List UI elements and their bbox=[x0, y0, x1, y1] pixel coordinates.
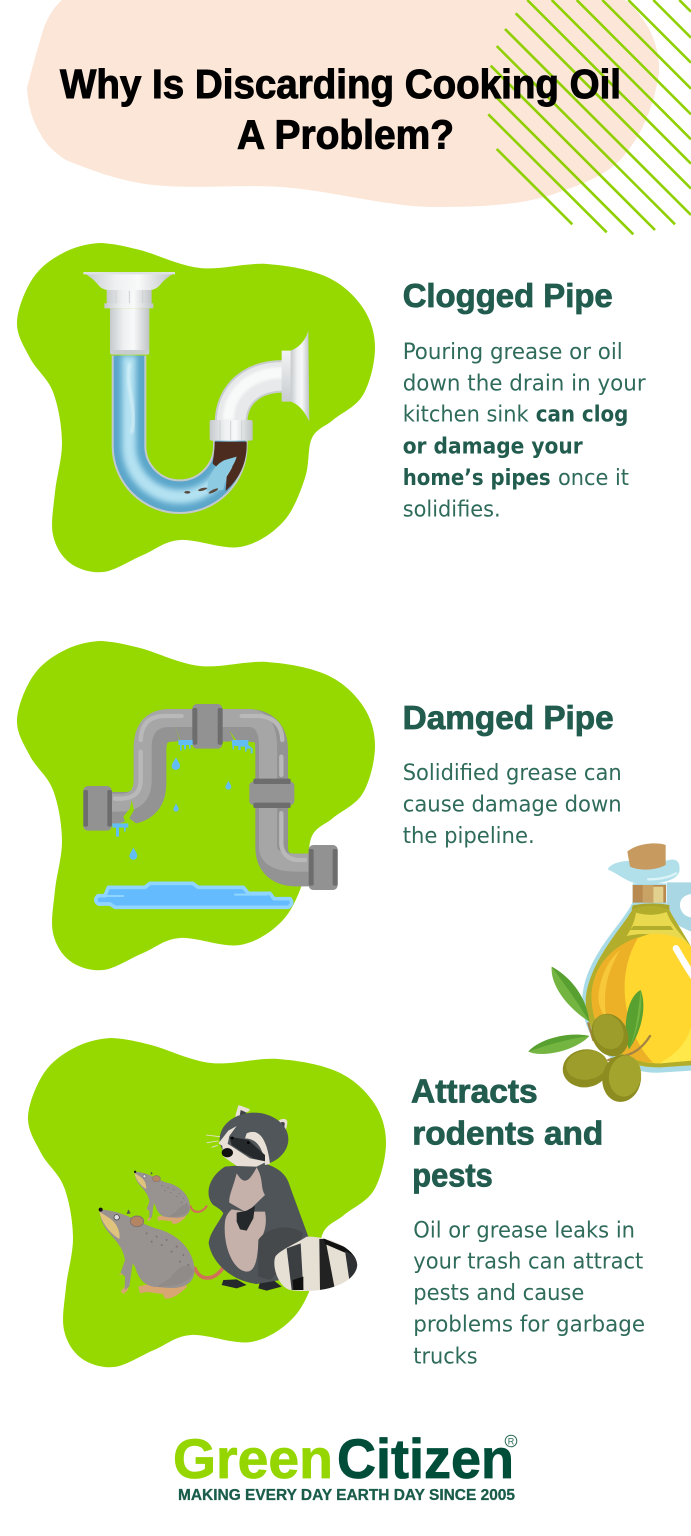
body text: Oil or grease leaks in bbox=[413, 1217, 635, 1243]
heading bbox=[411, 1072, 603, 1194]
jug handle bbox=[667, 882, 691, 932]
body text: pests and cause bbox=[413, 1280, 584, 1306]
body text: home’s pipes bbox=[403, 465, 551, 491]
large rat bbox=[99, 1208, 223, 1299]
green blob bbox=[17, 243, 375, 572]
body text: solidifies. bbox=[403, 497, 501, 523]
body text: trucks bbox=[413, 1343, 478, 1369]
cracks bbox=[167, 725, 193, 752]
body text bbox=[403, 760, 622, 849]
icon: olive oil bottle with olives bbox=[528, 843, 691, 1104]
logo: GreenCitizen: Citizen bbox=[337, 1427, 514, 1490]
body text: Pouring grease or oil bbox=[403, 339, 623, 365]
body text: can clog bbox=[536, 402, 628, 428]
decorative diagonal lines bbox=[488, 0, 691, 234]
body text bbox=[413, 1217, 645, 1369]
title: Why Is Discarding Cooking Oil bbox=[60, 61, 621, 107]
green blob bbox=[17, 641, 375, 970]
puddle bbox=[96, 883, 292, 907]
icon: leaking grey pipe bbox=[83, 704, 338, 907]
icon: clogged drain pipe bbox=[83, 272, 309, 497]
body text: the pipeline. bbox=[403, 823, 535, 849]
panel: clogged pipe bbox=[17, 243, 646, 572]
icon: raccoon and rats bbox=[99, 1107, 358, 1299]
panel: damaged pipe bbox=[17, 641, 622, 970]
heading: Clogged Pipe bbox=[403, 277, 613, 314]
heading: Damged Pipe bbox=[403, 699, 614, 736]
drips bbox=[112, 740, 253, 860]
heading: pests bbox=[412, 1157, 493, 1194]
title: A Problem? bbox=[237, 112, 454, 158]
body text bbox=[403, 339, 646, 523]
header blob bbox=[27, 0, 659, 207]
body text: cause damage down bbox=[403, 791, 622, 817]
body text: or damage your bbox=[403, 433, 584, 459]
title bbox=[60, 61, 621, 158]
body text: your trash can attract bbox=[413, 1248, 643, 1274]
body text: problems for garbage bbox=[413, 1312, 645, 1338]
clog bbox=[213, 442, 247, 491]
heading: Attracts bbox=[411, 1072, 538, 1109]
panel: rodents and pests bbox=[28, 1038, 645, 1369]
green blob bbox=[28, 1038, 386, 1367]
raccoon bbox=[206, 1107, 358, 1291]
logo: GreenCitizen bbox=[173, 1427, 517, 1504]
body text: Solidified grease can bbox=[403, 760, 622, 786]
small rat bbox=[134, 1171, 207, 1224]
logo: GreenCitizen: MAKING EVERY DAY EARTH DAY SINCE 2005 bbox=[178, 1487, 515, 1504]
body text: kitchen sink bbox=[403, 402, 529, 428]
logo: GreenCitizen: Green bbox=[173, 1427, 333, 1490]
body text: once it bbox=[558, 465, 629, 491]
heading: rodents and bbox=[412, 1114, 603, 1151]
body text: down the drain in your bbox=[403, 370, 646, 396]
logo: GreenCitizen: R bbox=[508, 1436, 515, 1446]
